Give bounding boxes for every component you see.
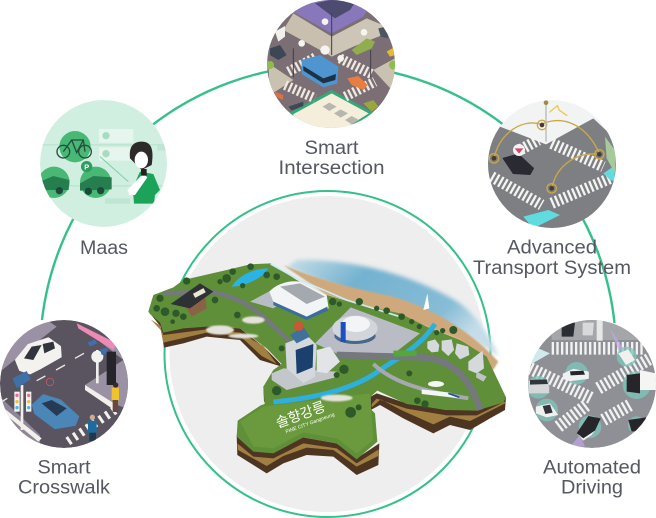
label: Automated Driving: Driving — [561, 478, 623, 498]
green area — [605, 137, 616, 173]
cars — [352, 38, 375, 55]
lake — [232, 268, 268, 287]
sea and beach — [283, 260, 498, 370]
soil layers — [149, 313, 506, 475]
wifi badge — [513, 144, 525, 156]
crosswalks — [285, 57, 375, 98]
label: Smart Crosswalk: Smart — [38, 458, 91, 478]
car — [503, 154, 533, 174]
teal halos — [527, 347, 651, 438]
bus — [302, 55, 338, 87]
roads — [163, 292, 480, 410]
panel: Smart Crosswalk illustration — [0, 320, 130, 448]
label: Smart Intersection: Intersection — [278, 158, 384, 179]
small buildings — [427, 339, 487, 382]
panel: Maas illustration — [38, 100, 167, 227]
map lettering — [274, 396, 336, 437]
outer connecting ring — [42, 65, 614, 323]
car bubble left — [38, 167, 70, 198]
camera nodes — [492, 123, 602, 191]
panel: Smart Intersection illustration — [266, 0, 398, 133]
panel: Maas illustration: P — [84, 162, 89, 171]
map lettering: 솔향강릉 — [274, 398, 327, 431]
pedestrian blue — [88, 415, 97, 441]
KTX sign — [428, 381, 444, 387]
label: Smart Crosswalk: Crosswalk — [18, 478, 111, 498]
grass surface — [148, 263, 506, 459]
purple building — [294, 0, 367, 33]
blue car — [33, 395, 78, 428]
tower building — [272, 321, 340, 390]
traffic pole right — [96, 350, 99, 383]
traffic pole left — [21, 385, 23, 430]
central map panel — [148, 191, 506, 517]
train — [373, 364, 468, 398]
info cards — [99, 129, 133, 143]
lighter grass patches — [240, 393, 373, 453]
plaza — [250, 291, 420, 355]
car bubble right — [80, 167, 111, 198]
woman — [130, 142, 152, 170]
parking badge — [81, 161, 92, 172]
stadium — [269, 281, 329, 320]
roads — [485, 118, 622, 232]
label: Maas: Maas — [80, 238, 128, 259]
dome — [332, 316, 378, 344]
cyan curbs — [524, 210, 560, 226]
bushes — [267, 61, 274, 69]
label: Advanced Transport System: Transport System — [473, 258, 631, 279]
lane dashes — [2, 353, 84, 402]
hanok house — [171, 283, 213, 317]
label: Smart Intersection: Smart — [304, 138, 359, 159]
dark kiosk — [107, 352, 116, 385]
cars — [528, 323, 656, 441]
sidewalks — [0, 320, 57, 372]
sensor beams — [570, 328, 623, 447]
sidewalks — [283, 13, 332, 57]
pedestrian stripes — [65, 410, 115, 443]
island illustration — [148, 260, 506, 475]
label: Advanced Transport System: Advanced — [507, 238, 597, 258]
bus — [393, 351, 417, 357]
pole and bolt — [545, 105, 547, 142]
crosswalks — [530, 348, 653, 427]
panel: Automated Driving illustration — [527, 320, 656, 448]
white car — [16, 338, 61, 373]
bike bubble — [59, 131, 91, 162]
signal markers — [293, 13, 371, 77]
green circle outline — [164, 191, 490, 517]
signal arcs — [489, 120, 604, 193]
river — [273, 324, 435, 402]
map lettering: PINE CITY Gangneung — [285, 412, 336, 435]
crosswalks — [492, 140, 610, 205]
pale guide lines — [40, 144, 167, 204]
pedestrian yellow — [112, 382, 119, 412]
label: Automated Driving: Automated — [543, 458, 641, 478]
gray disc — [170, 196, 486, 512]
clouds — [206, 316, 353, 401]
trees — [153, 263, 457, 418]
speed sign — [46, 378, 54, 386]
panel: Advanced Transport System illustration — [485, 100, 622, 232]
parking strip — [552, 320, 647, 340]
bottom plot — [292, 92, 372, 133]
